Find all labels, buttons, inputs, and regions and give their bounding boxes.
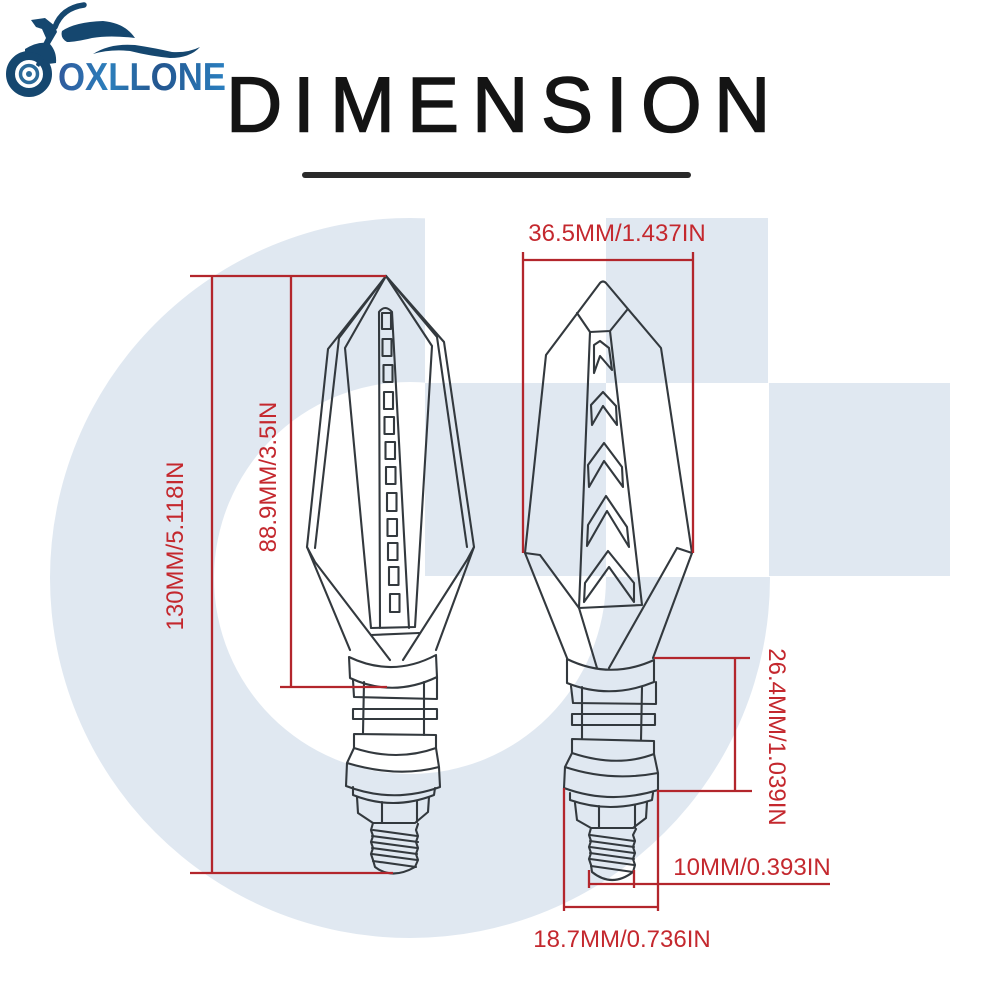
dimension: base width: 18.7MM/0.736IN — [533, 926, 711, 953]
dimension: thread width: 10MM/0.393IN — [673, 854, 831, 881]
title underline — [302, 172, 691, 178]
background: brand mark — [50, 210, 950, 938]
socket and bolt — [346, 655, 440, 874]
dimension: lens height: 88.9MM/3.5IN — [255, 402, 282, 552]
lamp outline — [525, 282, 692, 658]
dimension: socket length: 26.4MM/1.039IN — [763, 648, 790, 826]
socket and bolt — [564, 659, 658, 880]
lamp outline — [307, 276, 474, 650]
dimension: lens width: 36.5MM/1.437IN — [528, 220, 706, 247]
title: DIMENSION — [226, 60, 770, 148]
LED cells — [382, 313, 400, 612]
dimension: socket length — [654, 648, 790, 826]
logo wordmark: OXLLONE — [58, 56, 226, 99]
dimension: lens width — [523, 220, 706, 553]
dimension: overall height: 130MM/5.118IN — [162, 462, 189, 630]
dimension: base width — [533, 788, 711, 953]
dimension: lens height — [255, 276, 387, 688]
left lamp drawing — [307, 276, 474, 874]
dimension: overall height — [162, 276, 393, 873]
chevrons — [584, 341, 634, 602]
right lamp drawing — [525, 282, 692, 880]
logo — [10, 5, 226, 99]
LED channel — [379, 308, 409, 628]
dimension: thread width — [589, 854, 831, 888]
icon: motorcycle — [10, 5, 200, 92]
